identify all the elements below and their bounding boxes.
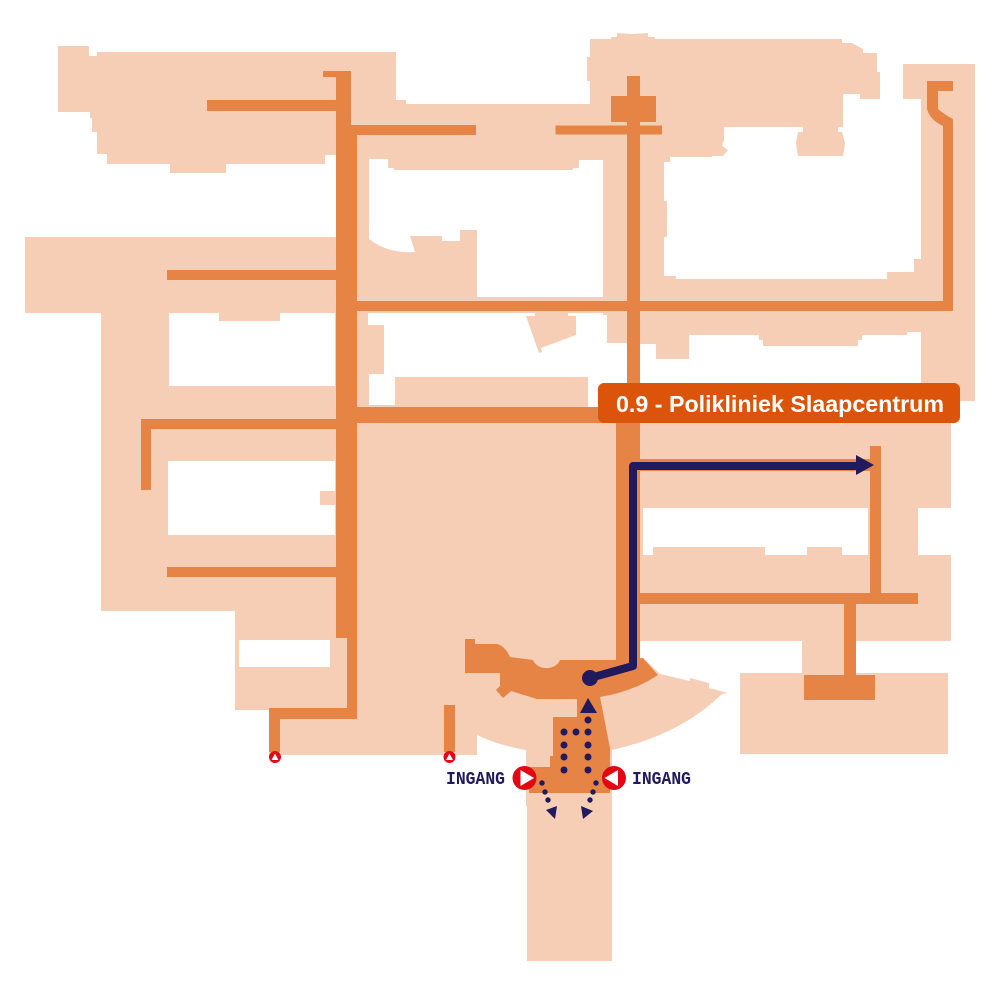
courtyard middle (368, 313, 627, 407)
corridor central (357, 407, 617, 423)
icon: entrance marker right (602, 766, 626, 790)
entrance hall (465, 639, 658, 793)
icon: south exit marker centre (444, 751, 456, 763)
icon: entrance marker left (512, 766, 536, 790)
corridor south-east branch (844, 604, 856, 676)
corridor east lower (640, 593, 918, 604)
entrance label left: INGANG (446, 770, 505, 790)
corridor east vertical (870, 446, 881, 596)
destination label (598, 383, 960, 423)
icon: south exit marker west (269, 751, 281, 763)
courtyard left middle (168, 461, 335, 535)
courtyard right lower (643, 508, 868, 555)
corridor towards entrance hall (616, 423, 640, 663)
corridor east upper (640, 459, 872, 471)
short south corridor (444, 705, 455, 752)
dotted entrance route (539, 698, 599, 819)
entrance label right: INGANG (632, 770, 691, 790)
courtyard left lower (239, 640, 330, 667)
route line to destination (582, 455, 874, 686)
corridor top-left branch (207, 100, 337, 111)
main west corridor (269, 71, 476, 752)
corridor west branch lower (167, 567, 337, 577)
destination label: 0.9 - Polikliniek Slaapcentrum (616, 391, 944, 417)
courtyard left upper (169, 313, 335, 386)
corridor west branch middle (141, 419, 337, 490)
corridor west branch upper (167, 270, 337, 280)
corridor north stem with hall (556, 76, 662, 383)
courtyard right upper (640, 332, 921, 383)
south-east hall (804, 675, 875, 700)
corridor cross north (357, 301, 953, 311)
corridors (141, 71, 953, 793)
corridor north-east hook (927, 81, 953, 311)
courtyard upper (369, 159, 603, 297)
